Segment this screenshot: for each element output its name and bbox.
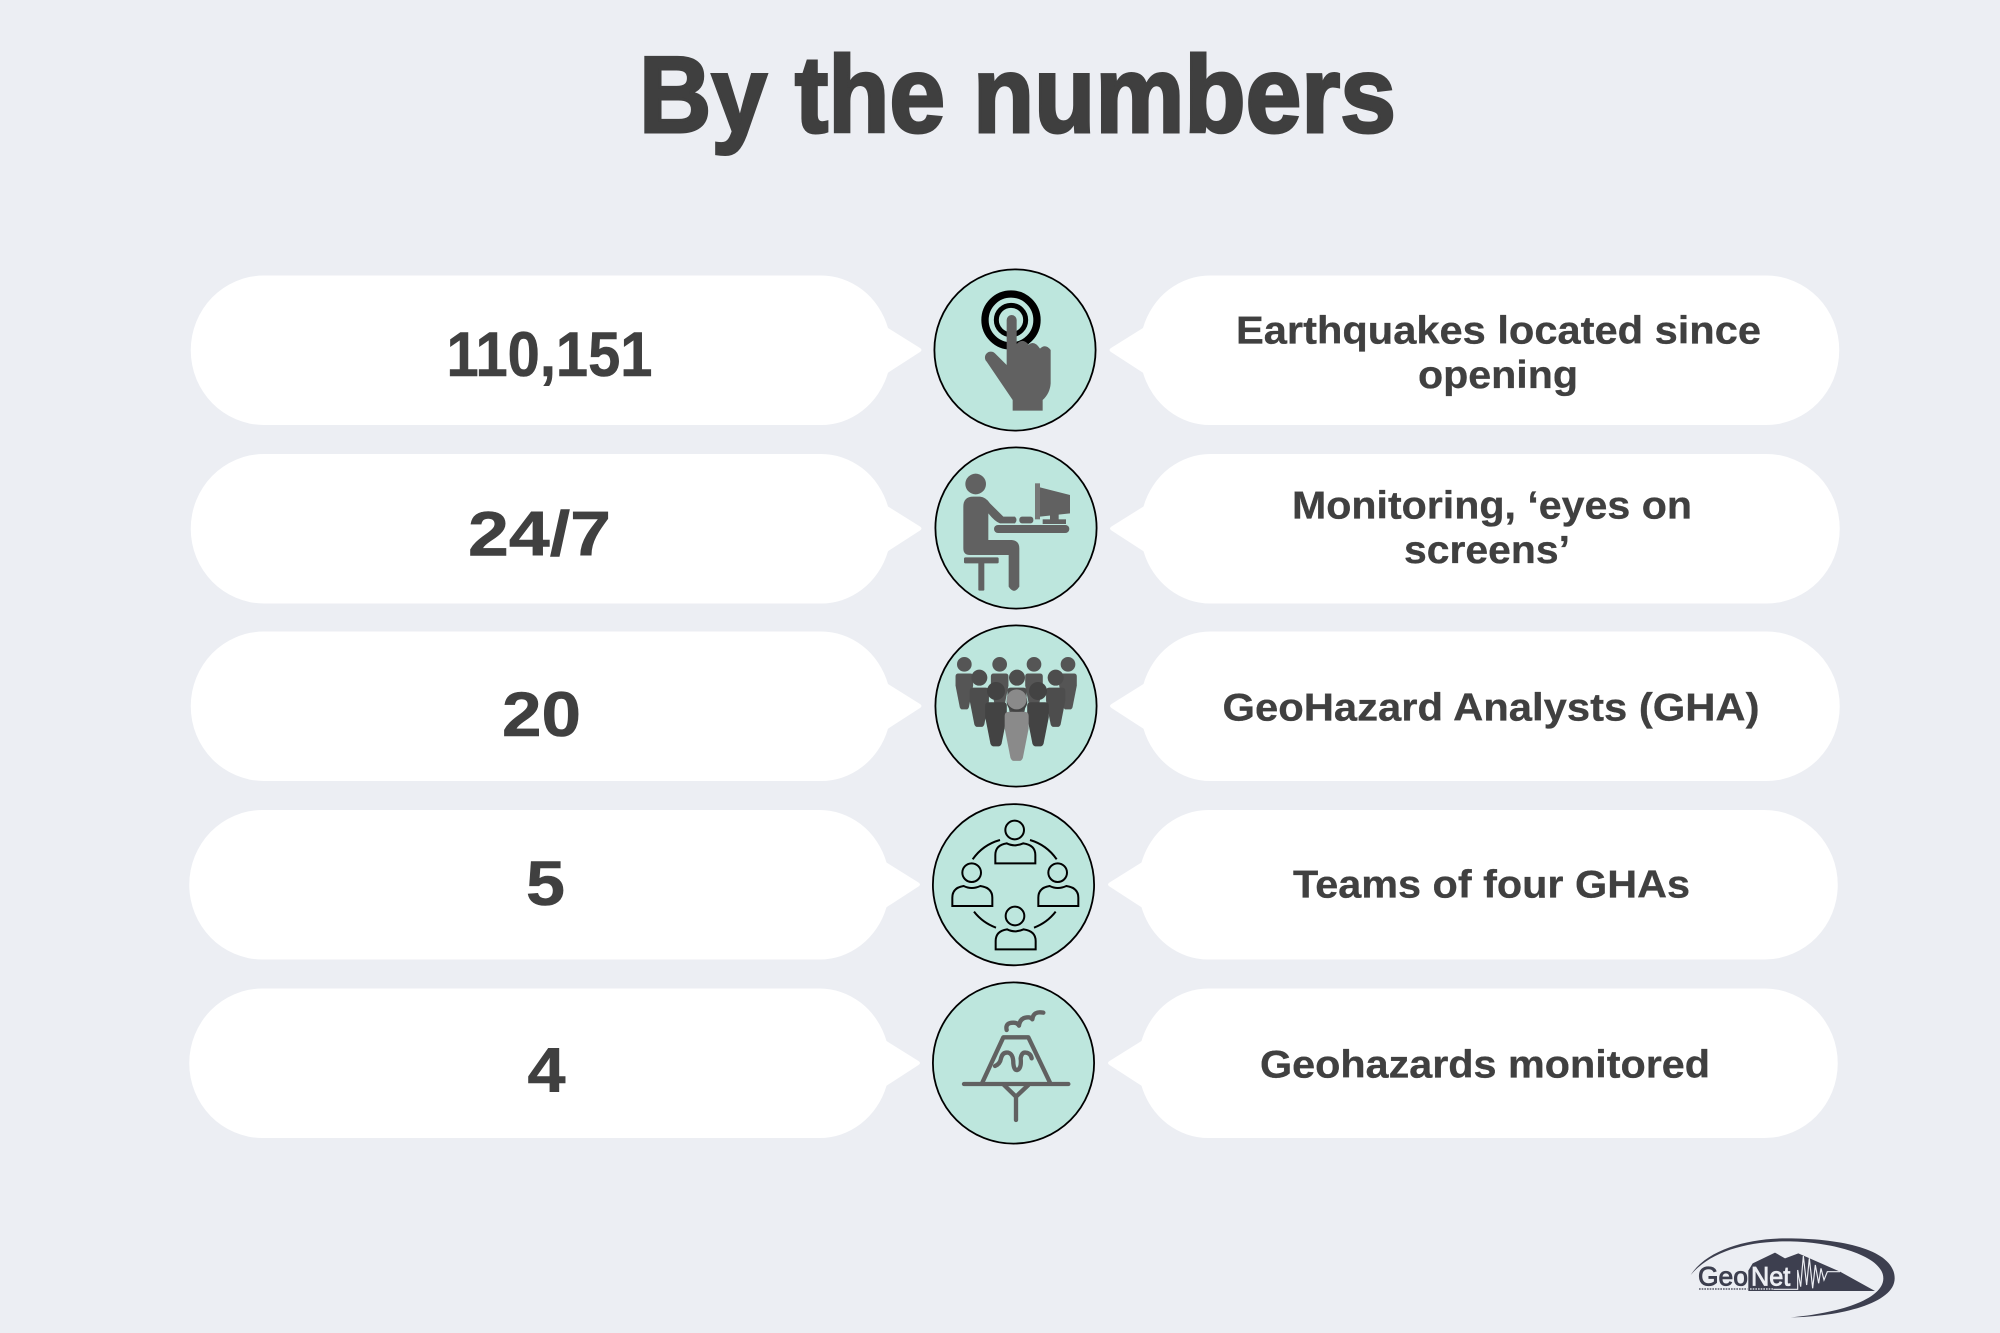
logo: GeoNet bbox=[1691, 1238, 1895, 1317]
icon: person at computer bbox=[935, 447, 1097, 609]
right pill: earthquakes located since opening: Earthquakes located since bbox=[1236, 310, 1761, 352]
right pill: teams of four GHAs: Teams of four GHAs bbox=[1293, 864, 1690, 906]
right pill: monitoring eyes on screens: Monitoring, ‘eyes on bbox=[1292, 484, 1692, 528]
left pill: 24/7: 24/7 bbox=[468, 500, 611, 570]
icon: team of four in a circle bbox=[933, 804, 1094, 965]
right pill: earthquakes located since opening bbox=[1110, 275, 1839, 425]
left pill: 4: 4 bbox=[528, 1036, 566, 1106]
right pill: monitoring eyes on screens bbox=[1110, 454, 1840, 604]
left pill: 4 bbox=[189, 988, 920, 1138]
left pill: 110,151: 110,151 bbox=[446, 320, 652, 390]
logo: GeoNet: Geo bbox=[1698, 1262, 1748, 1292]
left pill: 20: 20 bbox=[502, 680, 581, 750]
icon: hand touching target bbox=[934, 269, 1096, 431]
title: By the numbers bbox=[639, 34, 1396, 156]
row 2: monitoring bbox=[191, 447, 1840, 609]
logo: GeoNet: Net bbox=[1751, 1262, 1791, 1292]
left pill: 24/7 bbox=[191, 454, 922, 604]
right pill: teams of four GHAs bbox=[1108, 810, 1838, 960]
row 5: geohazards bbox=[189, 982, 1838, 1144]
right pill: earthquakes located since opening: opening bbox=[1418, 354, 1578, 397]
left pill: 5 bbox=[189, 810, 920, 960]
right pill: geohazards monitored: Geohazards monitored bbox=[1260, 1044, 1710, 1086]
row 3: analysts bbox=[191, 625, 1840, 787]
right pill: geohazard analysts bbox=[1110, 631, 1840, 781]
left pill: 20 bbox=[191, 631, 922, 781]
icon: volcano bbox=[933, 982, 1094, 1144]
left pill: 110,151 bbox=[191, 275, 922, 425]
right pill: geohazards monitored bbox=[1108, 988, 1838, 1138]
row 1: earthquakes located bbox=[191, 269, 1839, 431]
right pill: geohazard analysts: GeoHazard Analysts (GHA) bbox=[1222, 686, 1760, 730]
icon: crowd of analysts bbox=[935, 625, 1097, 787]
row 4: teams bbox=[189, 804, 1838, 965]
right pill: monitoring eyes on screens: screens’ bbox=[1404, 529, 1570, 572]
left pill: 5: 5 bbox=[526, 849, 565, 919]
